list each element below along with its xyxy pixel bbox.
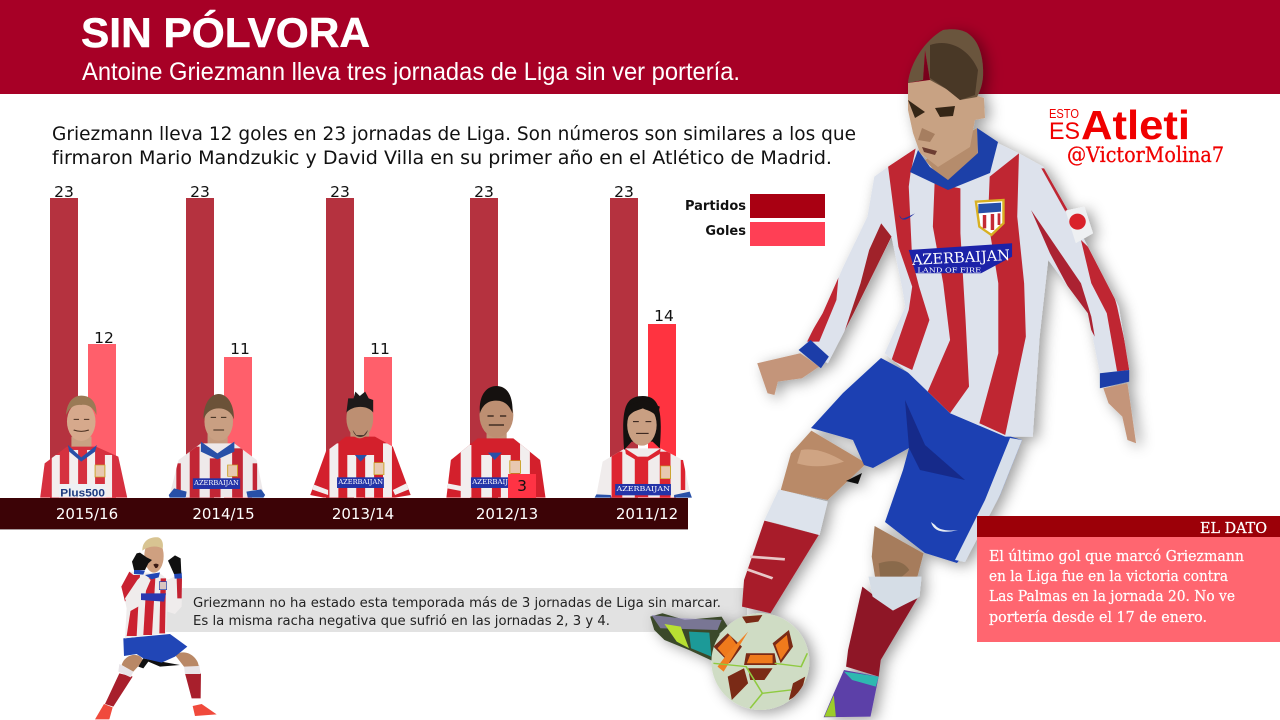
lower body — [650, 431, 924, 717]
player portraits — [40, 386, 692, 499]
ball — [711, 613, 809, 710]
portrait: Griezmann: Plus500 — [60, 486, 105, 499]
bars 2015/16: 23 — [54, 183, 74, 201]
collar — [910, 128, 998, 190]
bar chart: partidos y goles por temporada — [50, 183, 676, 498]
crest — [976, 200, 1003, 235]
arms — [121, 572, 139, 602]
callout: racha negativa: Es la misma racha negativa que sufrió en las jornadas 2, 3 y 4. — [193, 614, 610, 629]
neck — [925, 128, 978, 186]
panel: el dato: en la Liga fue en la victoria contra — [989, 569, 1228, 585]
panel: el dato: Las Palmas en la jornada 20. No ve — [989, 589, 1235, 605]
panel: el dato — [977, 516, 1280, 642]
bars 2013/14 — [326, 183, 392, 498]
shorts — [811, 358, 1022, 563]
gloves — [132, 553, 152, 570]
callout: racha negativa — [165, 588, 747, 632]
bar 2012/13 partidos — [470, 183, 498, 498]
sponsor — [909, 243, 1012, 275]
small player: Griezmann celebrating — [95, 537, 217, 719]
intro text block: firmaron Mario Mandzukic y David Villa en su primer año en el Atlético de Madrid. — [52, 147, 832, 169]
bars 2014/15: 23 — [190, 183, 210, 201]
portrait: Villa — [309, 392, 412, 498]
legend — [685, 194, 825, 246]
panel: el dato: portería desde el 17 de enero. — [989, 610, 1207, 626]
callout: racha negativa: Griezmann no ha estado esta temporada más de 3 jornadas de Liga sin marcar. — [193, 596, 721, 611]
portrait: Costa — [446, 386, 546, 498]
logo: Esto es Atleti: @VictorMolina7 — [1067, 143, 1224, 167]
logo: Esto es Atleti: Atleti — [1081, 102, 1190, 148]
sponsor: LAND OF FIRE — [917, 267, 981, 275]
title: SIN PÓLVORA — [81, 8, 370, 56]
head — [144, 539, 164, 573]
bars 2015/16: 12 — [94, 329, 114, 347]
right hand — [1103, 383, 1136, 443]
face — [908, 80, 985, 167]
portrait: Mandzukic: AZERBAIJAN — [193, 479, 239, 487]
season band: 2014/15 — [192, 505, 255, 523]
intro text block: Griezmann lleva 12 goles en 23 jornadas de Liga. Son números son similares a los que — [52, 123, 856, 145]
left leg — [742, 431, 866, 613]
boot — [650, 613, 728, 663]
bars 2011/12 — [610, 183, 676, 498]
bars 2013/14: 11 — [370, 340, 390, 358]
portrait: Villa: AZERBAIJAN — [337, 478, 383, 486]
bar: goles 2012/13: 3 — [517, 477, 527, 495]
bars 2014/15: 11 — [230, 340, 250, 358]
season band: 2012/13 — [476, 505, 538, 523]
bars 2013/14: 23 — [330, 183, 350, 201]
bars 2011/12: 23 — [614, 183, 634, 201]
sponsor: AZERBAIJAN — [910, 246, 1010, 269]
badge — [1065, 207, 1093, 243]
bar 2012/13 partidos: 23 — [474, 183, 494, 201]
torso — [122, 572, 168, 638]
header band — [0, 0, 1280, 94]
season band: 2013/14 — [332, 505, 394, 523]
bar: goles 2012/13 — [508, 474, 536, 498]
portrait: Mandzukic — [169, 394, 265, 498]
bars 2015/16 — [50, 183, 116, 498]
right leg — [824, 526, 924, 717]
head and collar — [908, 29, 998, 190]
intro text block — [52, 123, 856, 169]
logo: Esto es Atleti: ES — [1049, 118, 1080, 145]
logo: Esto es Atleti: ESTO — [1049, 107, 1079, 121]
legend: Partidos — [685, 199, 746, 214]
panel: el dato: EL DATO — [1200, 521, 1267, 537]
cuffs — [799, 340, 1129, 388]
panel: el dato: El último gol que marcó Griezmann — [989, 549, 1244, 565]
legs and boots — [105, 673, 201, 707]
season band — [0, 498, 688, 530]
subtitle: Antoine Griezmann lleva tres jornadas de Liga sin ver portería. — [82, 58, 740, 86]
season band: 2015/16 — [56, 505, 118, 523]
portrait: Falcao — [595, 396, 692, 498]
portrait: Costa: AZERBAIJ — [471, 478, 508, 486]
season band: 2011/12 — [616, 505, 678, 523]
portrait: Falcao: AZERBAIJAN — [615, 485, 670, 493]
logo: Esto es Atleti — [1049, 102, 1224, 167]
bars 2014/15 — [186, 183, 252, 498]
hair — [908, 29, 983, 100]
jersey — [802, 143, 1131, 437]
bars 2011/12: 14 — [654, 307, 674, 325]
main player: Antoine Griezmann — [650, 29, 1136, 717]
upper body — [757, 143, 1136, 443]
left hand — [757, 353, 819, 395]
legend: Goles — [705, 224, 746, 239]
portrait: Griezmann — [40, 396, 127, 499]
